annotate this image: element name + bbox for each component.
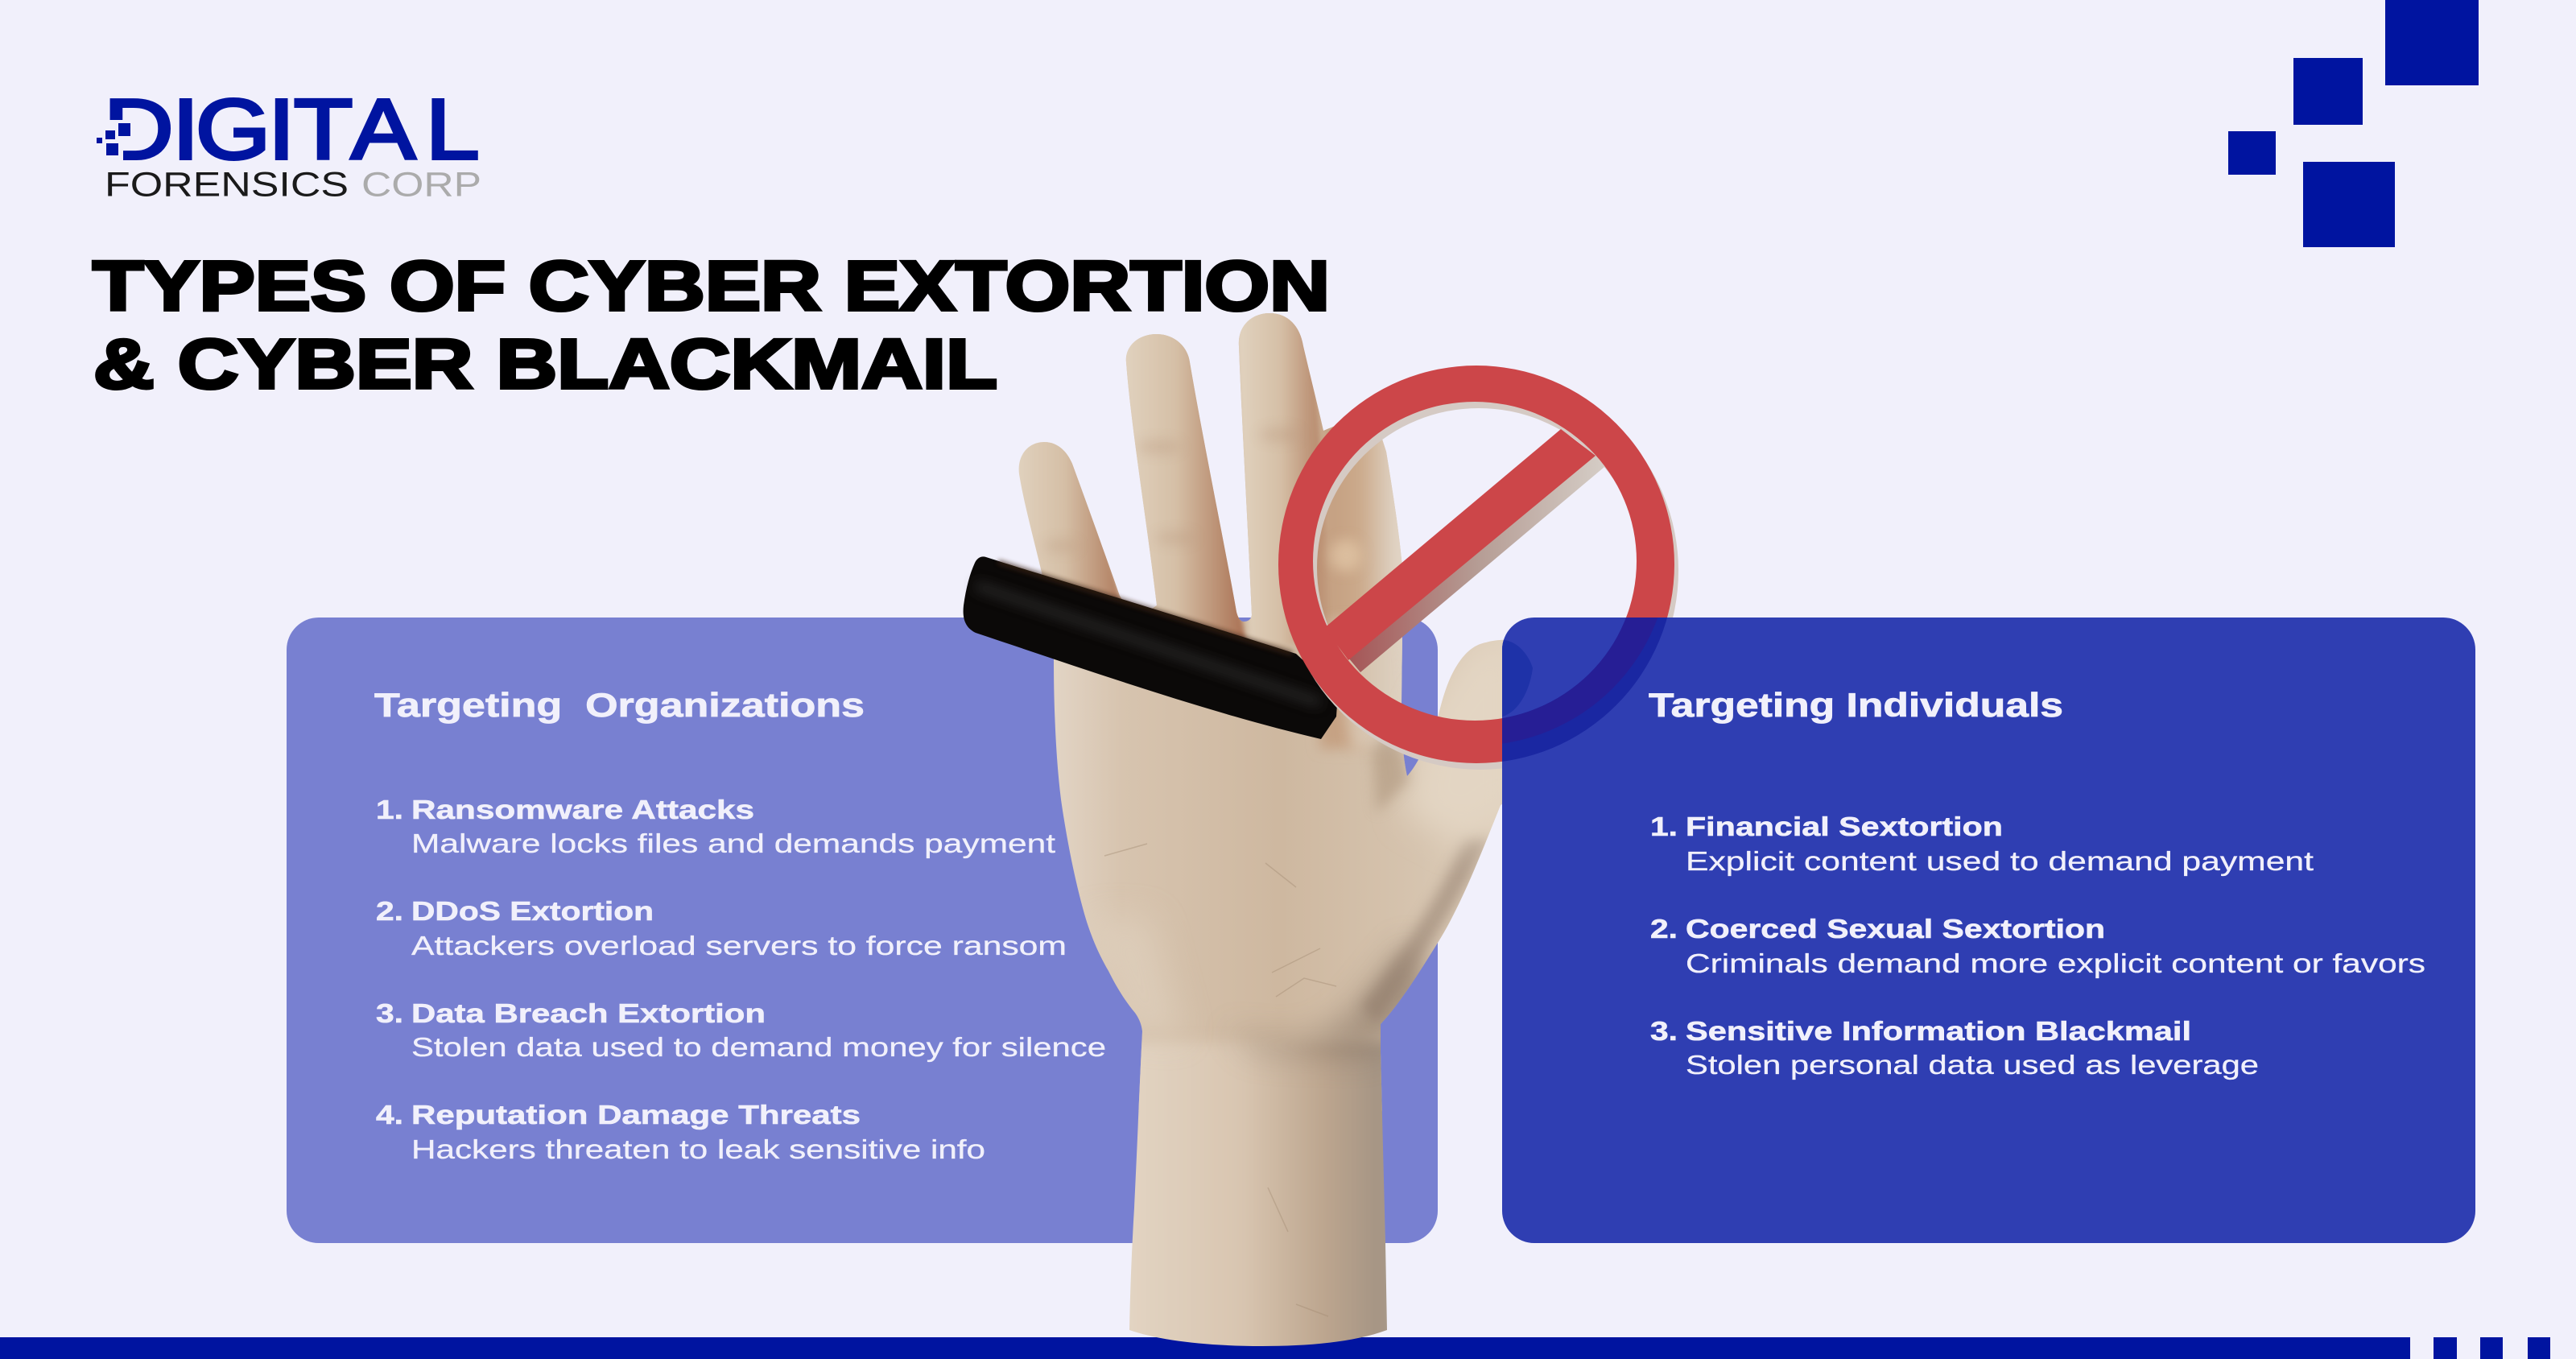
item 4: 4.: [376, 1100, 403, 1130]
item 2: [1650, 914, 2425, 978]
item 3: Stolen personal data used as leverage: [1686, 1050, 2259, 1080]
item 2: [376, 896, 1067, 960]
title line 2: & CYBER BLACKMAIL: [93, 325, 997, 403]
tube top brown edge: [998, 562, 1292, 654]
item 2: Criminals demand more explicit content or favors: [1686, 948, 2425, 978]
title line 1: TYPES OF CYBER EXTORTION: [93, 247, 1330, 325]
sign outer rim: [1502, 618, 1667, 762]
thumb seen through panel: [1502, 640, 1533, 717]
item 3: Stolen data used to demand money for silence: [411, 1032, 1106, 1062]
logo tagline: FORENSICS: [105, 166, 349, 204]
item 2: Coerced Sexual Sextortion: [1686, 914, 2105, 944]
index finger: [1320, 386, 1409, 749]
item 3: Sensitive Information Blackmail: [1686, 1016, 2191, 1046]
logo wordmark: DIGITAL: [104, 81, 479, 176]
item 3: 3.: [1650, 1016, 1678, 1046]
item 3: [1650, 1016, 2259, 1080]
palm lower-left light: [1102, 931, 1167, 1031]
item 2: 2.: [376, 896, 403, 926]
sign slash: [1324, 429, 1596, 660]
item 4: [376, 1100, 985, 1164]
panel background: [287, 618, 1438, 1243]
decorative squares top right: [2228, 0, 2479, 247]
finger base light: [1327, 615, 1383, 750]
item 1: Financial Sextortion: [1686, 812, 2003, 841]
icon: black tube: [964, 556, 1338, 739]
item 2: Attackers overload servers to force ransom: [411, 931, 1067, 960]
logo cut in the D: [103, 120, 137, 164]
item 1: Explicit content used to demand payment: [1686, 846, 2314, 876]
panel: targeting organizations: [287, 618, 1438, 1243]
palm to wrist shadow: [1224, 942, 1441, 1055]
icon: prohibition sign: [1278, 366, 1678, 770]
logo: Digital Forensics Corp: [97, 81, 481, 204]
item 1: Malware locks files and demands payment: [411, 828, 1055, 858]
palm base: [1046, 306, 1513, 1111]
item 1: 1.: [376, 795, 403, 824]
item 1: Ransomware Attacks: [411, 795, 754, 824]
scratches: [1104, 844, 1336, 1316]
ring finger: [1119, 322, 1246, 644]
item 3: Data Breach Extortion: [411, 998, 766, 1028]
panel heading: Targeting Individuals: [1649, 686, 2063, 724]
logo pixel squares: [97, 123, 130, 155]
logo tagline corp: CORP: [361, 166, 481, 204]
sign depth: [1282, 372, 1678, 770]
palm crease dark: [1373, 725, 1409, 813]
wrist: [1129, 1039, 1387, 1346]
palm right edge shade: [1360, 837, 1489, 1022]
slash depth: [1348, 454, 1604, 672]
pinky finger: [1019, 442, 1122, 599]
item 1: [1650, 812, 2314, 876]
item 3: [376, 998, 1106, 1062]
item 2: 2.: [1650, 914, 1678, 944]
item 4: Hackers threaten to leak sensitive info: [411, 1134, 985, 1164]
index joint highlight: [1330, 539, 1362, 572]
icon: clay hand: [1010, 306, 1521, 1359]
sign ring: [1278, 366, 1674, 763]
bottom bar: [0, 1337, 2550, 1359]
item 1: 1.: [1650, 812, 1678, 841]
title: [93, 247, 1330, 403]
panel: targeting individuals: [1502, 618, 2475, 1243]
panel heading: Targeting Organizations: [374, 686, 865, 724]
sign inner band: [1502, 618, 1657, 744]
tube highlight: [976, 585, 1320, 703]
sign seen through panel: [1502, 618, 1667, 762]
item 4: Reputation Damage Threats: [411, 1100, 861, 1130]
panel background: [1502, 618, 2475, 1243]
finger joints: [1043, 428, 1301, 551]
item 3: 3.: [376, 998, 403, 1028]
middle finger: [1239, 313, 1327, 644]
item 2: DDoS Extortion: [411, 896, 654, 926]
item 1: [376, 795, 1055, 858]
thumb: [1405, 660, 1502, 853]
